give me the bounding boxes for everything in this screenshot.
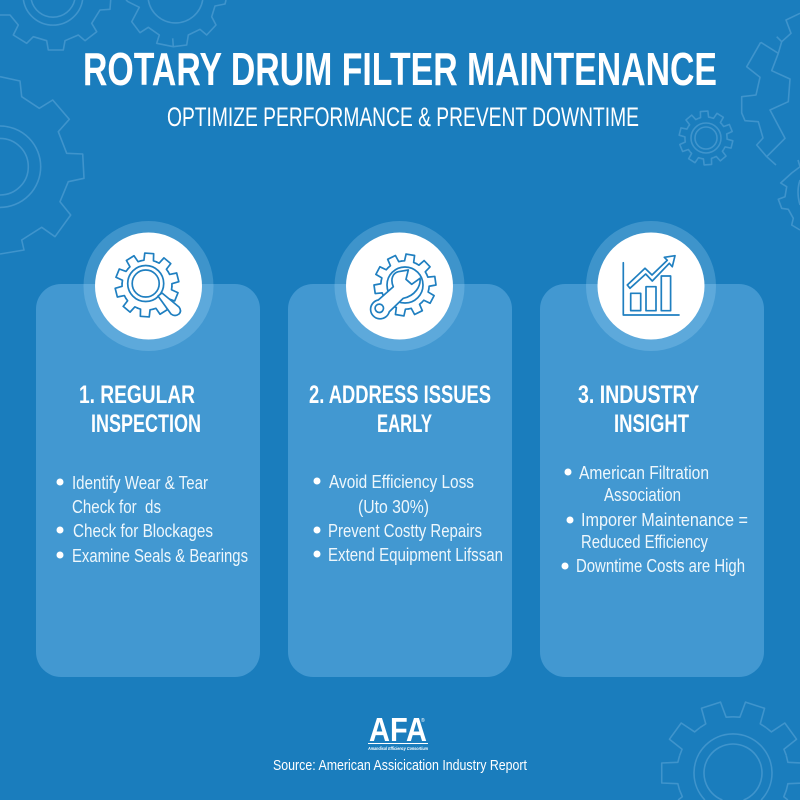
heading: INSPECTION — [91, 410, 201, 438]
bullet list: (Uto 30%) — [358, 497, 429, 517]
panel: industry insight — [540, 221, 764, 677]
heading: 2. ADDRESS ISSUES — [309, 381, 491, 409]
bullet list: Avoid Efficiency Loss — [329, 472, 474, 492]
card — [288, 284, 512, 677]
heading — [79, 381, 201, 438]
icon badge: wrench in gear — [334, 221, 464, 351]
panel: address issues early — [288, 221, 512, 677]
panel: regular inspection — [36, 221, 260, 677]
bullet list: Association — [604, 485, 681, 505]
bullet list: Imporer Maintenance = — [581, 510, 748, 530]
logo: AFA: Amandisal Efficiency Consortium — [367, 746, 428, 751]
bullet list: Identify Wear & Tear — [72, 473, 208, 493]
bullet list — [56, 473, 248, 566]
source line: Source: American Assicication Industry Report — [273, 758, 527, 774]
bullet list — [562, 463, 748, 576]
bullet list: Check for ds — [72, 497, 161, 517]
bullet list: Reduced Efficiency — [581, 532, 708, 552]
logo: AFA: AFA — [369, 711, 427, 748]
bullet list: Downtime Costs are High — [576, 556, 745, 576]
heading: 1. REGULAR — [79, 381, 195, 409]
icon badge: magnifier in gear — [84, 221, 214, 351]
bullet list: Extend Equipment Lifssan — [328, 545, 503, 565]
heading: 3. INDUSTRY — [578, 381, 699, 409]
bullet list: Check for Blockages — [73, 521, 213, 541]
bullet list: Prevent Costty Repairs — [328, 521, 482, 541]
icon badge: growth chart — [586, 221, 716, 351]
logo: AFA: ® — [421, 717, 425, 724]
bullet list: American Filtration — [579, 463, 709, 483]
heading: INSIGHT — [614, 410, 689, 438]
card — [540, 284, 764, 677]
heading: EARLY — [377, 410, 432, 438]
bullet list: Examine Seals & Bearings — [72, 546, 248, 566]
heading — [578, 381, 699, 438]
bullet list — [314, 472, 503, 565]
card — [36, 284, 260, 677]
heading — [309, 381, 491, 438]
